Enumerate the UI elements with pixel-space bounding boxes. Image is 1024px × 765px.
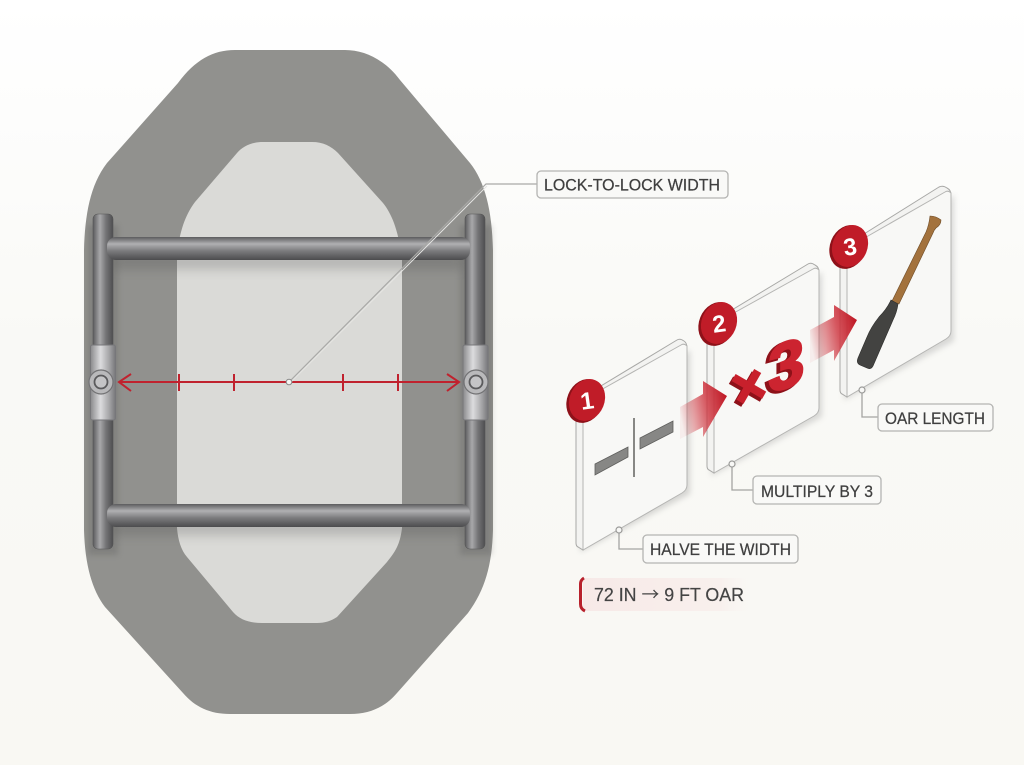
icon: times three: × [725, 351, 773, 420]
callout: worked example: 72 IN → 9 FT OAR [594, 581, 744, 607]
icon: oar [857, 216, 941, 369]
icon: times three: 3 [768, 322, 805, 409]
badge 3: 3 [842, 233, 859, 262]
arrow: step 1 to step 2 [680, 381, 727, 439]
label: multiply by 3: MULTIPLY BY 3 [761, 482, 873, 501]
icon: halved bar [595, 418, 673, 477]
callout: worked example [580, 578, 755, 611]
right oar lock [463, 345, 488, 420]
raft hull [84, 50, 493, 714]
label: oar length [859, 387, 993, 431]
icon: times three [722, 322, 805, 423]
arrow: step 2 to step 3 [810, 305, 857, 363]
label: halve the width [616, 527, 798, 563]
badge 3 [823, 219, 874, 275]
leader and label: lock-to-lock width [286, 171, 728, 385]
badge 1 [560, 373, 611, 429]
measurement arrow: lock to lock [119, 374, 459, 391]
badge 2 [692, 296, 743, 352]
label: oar length: OAR LENGTH [885, 409, 985, 428]
icon: times three: × [722, 354, 770, 423]
left oar lock [89, 345, 116, 420]
label: halve the width: HALVE THE WIDTH [650, 540, 791, 559]
step card 1: halve [560, 339, 690, 552]
step card 3: oar length [823, 186, 954, 400]
badge 1: 1 [579, 387, 596, 416]
frame: oar rig tubes [88, 214, 492, 555]
leader and label: lock-to-lock width: LOCK-TO-LOCK WIDTH [544, 176, 720, 194]
step card 2: multiply [692, 263, 822, 476]
icon: times three: 3 [765, 324, 802, 411]
inner floor [177, 142, 402, 623]
label: multiply by 3 [729, 461, 881, 504]
badge 2: 2 [711, 310, 728, 339]
